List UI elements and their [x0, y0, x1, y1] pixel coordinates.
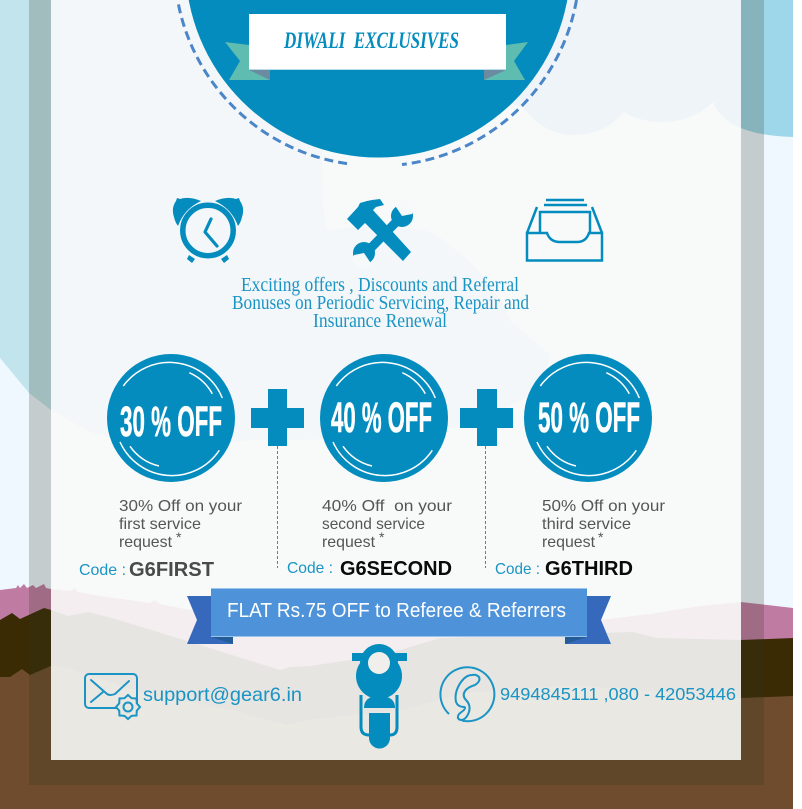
intro text: Insurance Renewal [313, 310, 447, 332]
code 1: G6FIRST [129, 559, 214, 581]
code 1: Code : [79, 562, 126, 579]
icon: mail with gear [85, 674, 140, 719]
badge: 40% off: 40 % OFF [331, 394, 432, 442]
offer text 3: third service [542, 516, 631, 533]
header badge circle [178, 0, 576, 164]
intro text: Bonuses on Periodic Servicing, Repair and [232, 292, 529, 314]
badge: 30% off [107, 354, 235, 482]
offer text 2: request [322, 534, 376, 551]
banner: flat offer [187, 588, 611, 644]
offer text 2: * [379, 529, 385, 545]
support email: support@gear6.in [143, 684, 302, 706]
ribbon: Diwali Exclusives [225, 14, 528, 80]
code 3: G6THIRD [545, 558, 633, 580]
offer text 3: request [542, 534, 596, 551]
code 3 [495, 558, 633, 580]
badge: 50% off: 50 % OFF [538, 394, 640, 442]
offer text 3: 50% Off on your [542, 498, 666, 515]
intro text: Exciting offers , Discounts and Referral [241, 274, 519, 296]
code 2: G6SECOND [340, 558, 452, 580]
phone numbers: 9494845111 ,080 - 42053446 [500, 684, 736, 704]
icon: scooter [352, 644, 407, 748]
badge: 30% off: 30 % OFF [120, 398, 222, 446]
banner: flat offer: FLAT Rs.75 OFF to Referee & Referrers [227, 600, 566, 622]
code 1 [79, 559, 214, 581]
icon: inbox tray [527, 200, 602, 260]
icon: phone [440, 667, 494, 721]
offer text 1 [119, 498, 243, 551]
plus sign 1 [251, 389, 304, 446]
icon: alarm clock [173, 198, 243, 263]
offer text 2: 40% Off on your [322, 498, 453, 515]
offer text 1: first service [119, 516, 201, 533]
offer text 1: request [119, 534, 173, 551]
code 3: Code : [495, 561, 540, 578]
intro text [232, 274, 529, 332]
code 2 [287, 558, 452, 580]
code 2: Code : [287, 560, 333, 577]
icon: hammer and wrench [347, 199, 414, 269]
offer text 3 [542, 498, 666, 551]
offer text 3: * [598, 529, 604, 545]
ribbon: Diwali Exclusives: DIWALI EXCLUSIVES [283, 28, 459, 53]
badge: 50% off [524, 354, 652, 482]
offer text 2 [322, 498, 453, 551]
offer text 1: * [176, 529, 182, 545]
badge: 40% off [320, 354, 448, 482]
plus sign 2 [460, 389, 513, 446]
offer text 1: 30% Off on your [119, 498, 243, 515]
dashed connectors [278, 446, 486, 568]
offer text 2: second service [322, 516, 425, 533]
